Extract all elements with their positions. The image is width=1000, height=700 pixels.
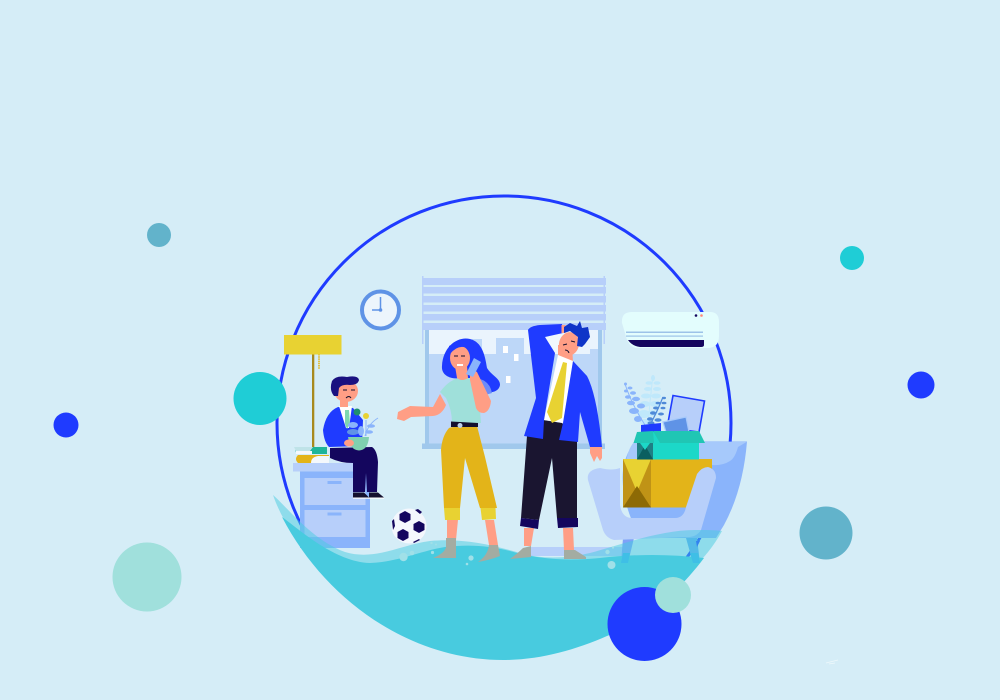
- armchair with boxes: [588, 375, 747, 563]
- phone: [466, 358, 481, 377]
- boy shoes: [353, 492, 384, 499]
- man hand: [590, 446, 602, 462]
- boy trousers: [330, 447, 378, 492]
- man trouser cuffs: [520, 518, 578, 529]
- gap under raised arm: [545, 333, 563, 354]
- plant pale centre: [638, 375, 661, 425]
- plant pot: [641, 423, 661, 433]
- woman sleeve: [480, 379, 492, 396]
- man shirt: [544, 355, 573, 423]
- chair back highlight: [626, 442, 746, 465]
- boy neck and head: [331, 376, 359, 407]
- man face: [556, 325, 582, 358]
- teal circle on ring: [234, 372, 286, 425]
- man trousers: [521, 420, 577, 520]
- chair seat and arms: [588, 467, 716, 540]
- woman t-shirt: [440, 378, 481, 423]
- green box: [634, 431, 705, 460]
- decorative circles behind scene: [54, 223, 934, 612]
- woman raised arm: [470, 368, 491, 413]
- belt: [451, 422, 478, 428]
- front water layer: [282, 517, 704, 660]
- man legs: [524, 528, 574, 550]
- faint white mark: [826, 660, 838, 664]
- ring outline: [277, 196, 731, 650]
- floor strip: [530, 547, 625, 556]
- floodwater: [273, 495, 722, 660]
- woman hair: [442, 338, 500, 392]
- stacked books: [294, 447, 329, 463]
- floor lamp: [284, 335, 342, 450]
- yellow box: [623, 459, 712, 508]
- chair back: [623, 442, 747, 538]
- boy plant in bowl: [344, 408, 378, 450]
- boy shirt and tie: [339, 406, 352, 429]
- back water layer: [273, 495, 722, 620]
- submerged feet: [433, 538, 586, 562]
- woman trouser cuffs: [444, 508, 496, 520]
- man jacket: [524, 324, 602, 447]
- man hair: [564, 321, 590, 347]
- woman pointing arm: [397, 394, 446, 421]
- large blue circle: [608, 587, 682, 661]
- mint circle: [655, 577, 691, 613]
- woman trousers: [441, 426, 497, 508]
- framed pictures: [663, 396, 704, 432]
- filing cabinet: [293, 463, 370, 548]
- boy jacket: [323, 407, 363, 447]
- man holding head: [520, 321, 602, 550]
- man neck: [558, 345, 573, 362]
- wall clock: [362, 292, 399, 328]
- plant dark blue right: [647, 397, 666, 425]
- stacked moving boxes: [623, 375, 712, 508]
- chair legs: [621, 538, 700, 563]
- plant light blue left: [624, 382, 645, 425]
- man tie: [547, 362, 567, 423]
- submerged chair legs: [621, 553, 700, 563]
- air conditioner: [622, 312, 719, 348]
- woman on phone: [397, 338, 500, 545]
- woman neck and face: [449, 340, 474, 380]
- woman legs: [447, 520, 498, 545]
- boy sitting on cabinet: [323, 376, 384, 499]
- soccer ball: [392, 508, 426, 544]
- window with city view and blinds: [422, 276, 606, 449]
- water bubbles: [399, 542, 616, 569]
